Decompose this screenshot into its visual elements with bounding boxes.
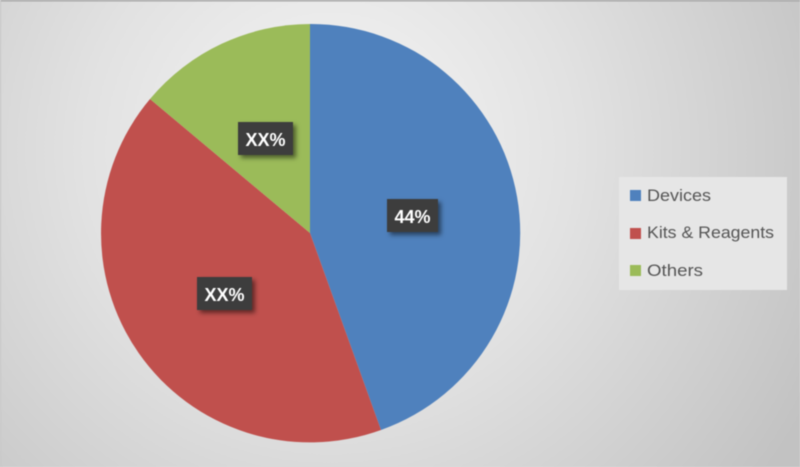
- data label: Kits & Reagents XX%: [197, 277, 252, 310]
- slice: Kits & Reagents: [101, 99, 381, 442]
- slice: Others: [150, 24, 310, 233]
- legend item: Others: [630, 261, 703, 280]
- legend: [619, 177, 787, 290]
- data label: Devices 44%: 44%: [394, 207, 431, 227]
- data label: Others XX%: XX%: [245, 130, 286, 150]
- data label: Devices 44%: [387, 199, 438, 232]
- slice: Devices 44%: [310, 24, 520, 430]
- pie chart: [101, 24, 520, 442]
- legend item: Devices: Devices: [647, 186, 711, 205]
- data label: Kits & Reagents XX%: XX%: [204, 285, 245, 305]
- legend item: Kits & Reagents: Kits & Reagents: [647, 223, 774, 242]
- data label: Others XX%: [238, 122, 293, 155]
- legend item: Others: Others: [647, 261, 703, 280]
